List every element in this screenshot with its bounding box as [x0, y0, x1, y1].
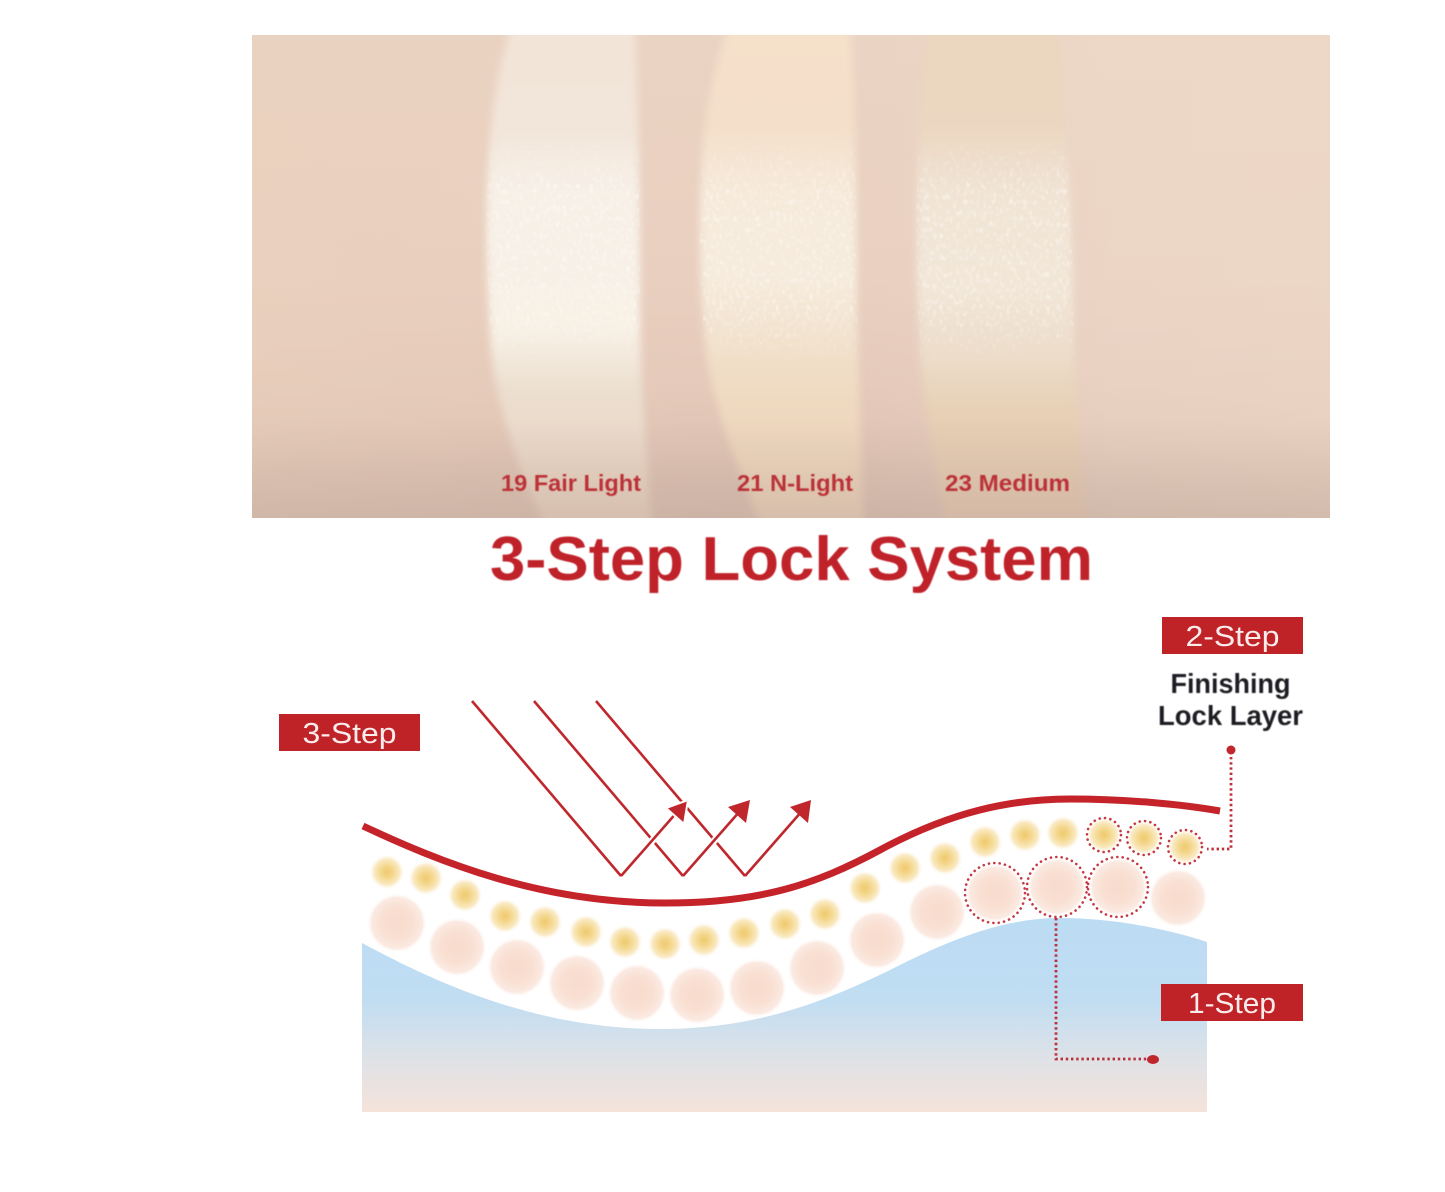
title: 3-Step Lock System [490, 525, 1093, 594]
blue skin layer [362, 918, 1207, 1112]
text: Finishing Lock Layer [1158, 668, 1303, 731]
arrow halos [640, 806, 744, 855]
label: 2-Step: 2-Step [1186, 621, 1280, 653]
label: 1-Step [1161, 984, 1303, 1021]
swatch: 23 Medium [915, 139, 1076, 472]
reflected rays [472, 701, 811, 876]
outgoing arrow 2 [683, 800, 750, 876]
incoming rays [472, 701, 745, 876]
skin background [252, 35, 1330, 518]
bottom shading [252, 456, 1330, 518]
connector: 2-step [1207, 746, 1236, 849]
text: Finishing Lock Layer: Finishing [1170, 668, 1290, 699]
text: Finishing Lock Layer: Lock Layer [1158, 700, 1303, 731]
panel: lock system diagram [279, 617, 1303, 1112]
connector: 1-step [1056, 918, 1205, 1064]
label: 3-Step: 3-Step [302, 718, 396, 750]
label: 23 Medium: 23 Medium [945, 470, 1070, 496]
swatch: 21 N-Light [695, 25, 865, 530]
swatch: 19 Fair Light [480, 25, 652, 530]
label: 2-Step [1162, 617, 1303, 654]
dotted highlight rings [965, 818, 1202, 923]
label: 1-Step: 1-Step [1188, 988, 1276, 1020]
outgoing arrow 1 [621, 800, 688, 876]
panel: skin swatch photo [252, 25, 1330, 530]
label: 21 N-Light: 21 N-Light [737, 470, 853, 496]
yellow particles [369, 815, 1203, 962]
finishing lock curve [363, 799, 1220, 903]
outgoing arrow 3 [745, 800, 811, 876]
peach particles [367, 857, 1208, 1025]
label: 19 Fair Light: 19 Fair Light [501, 470, 641, 496]
label: 3-Step [279, 714, 420, 751]
